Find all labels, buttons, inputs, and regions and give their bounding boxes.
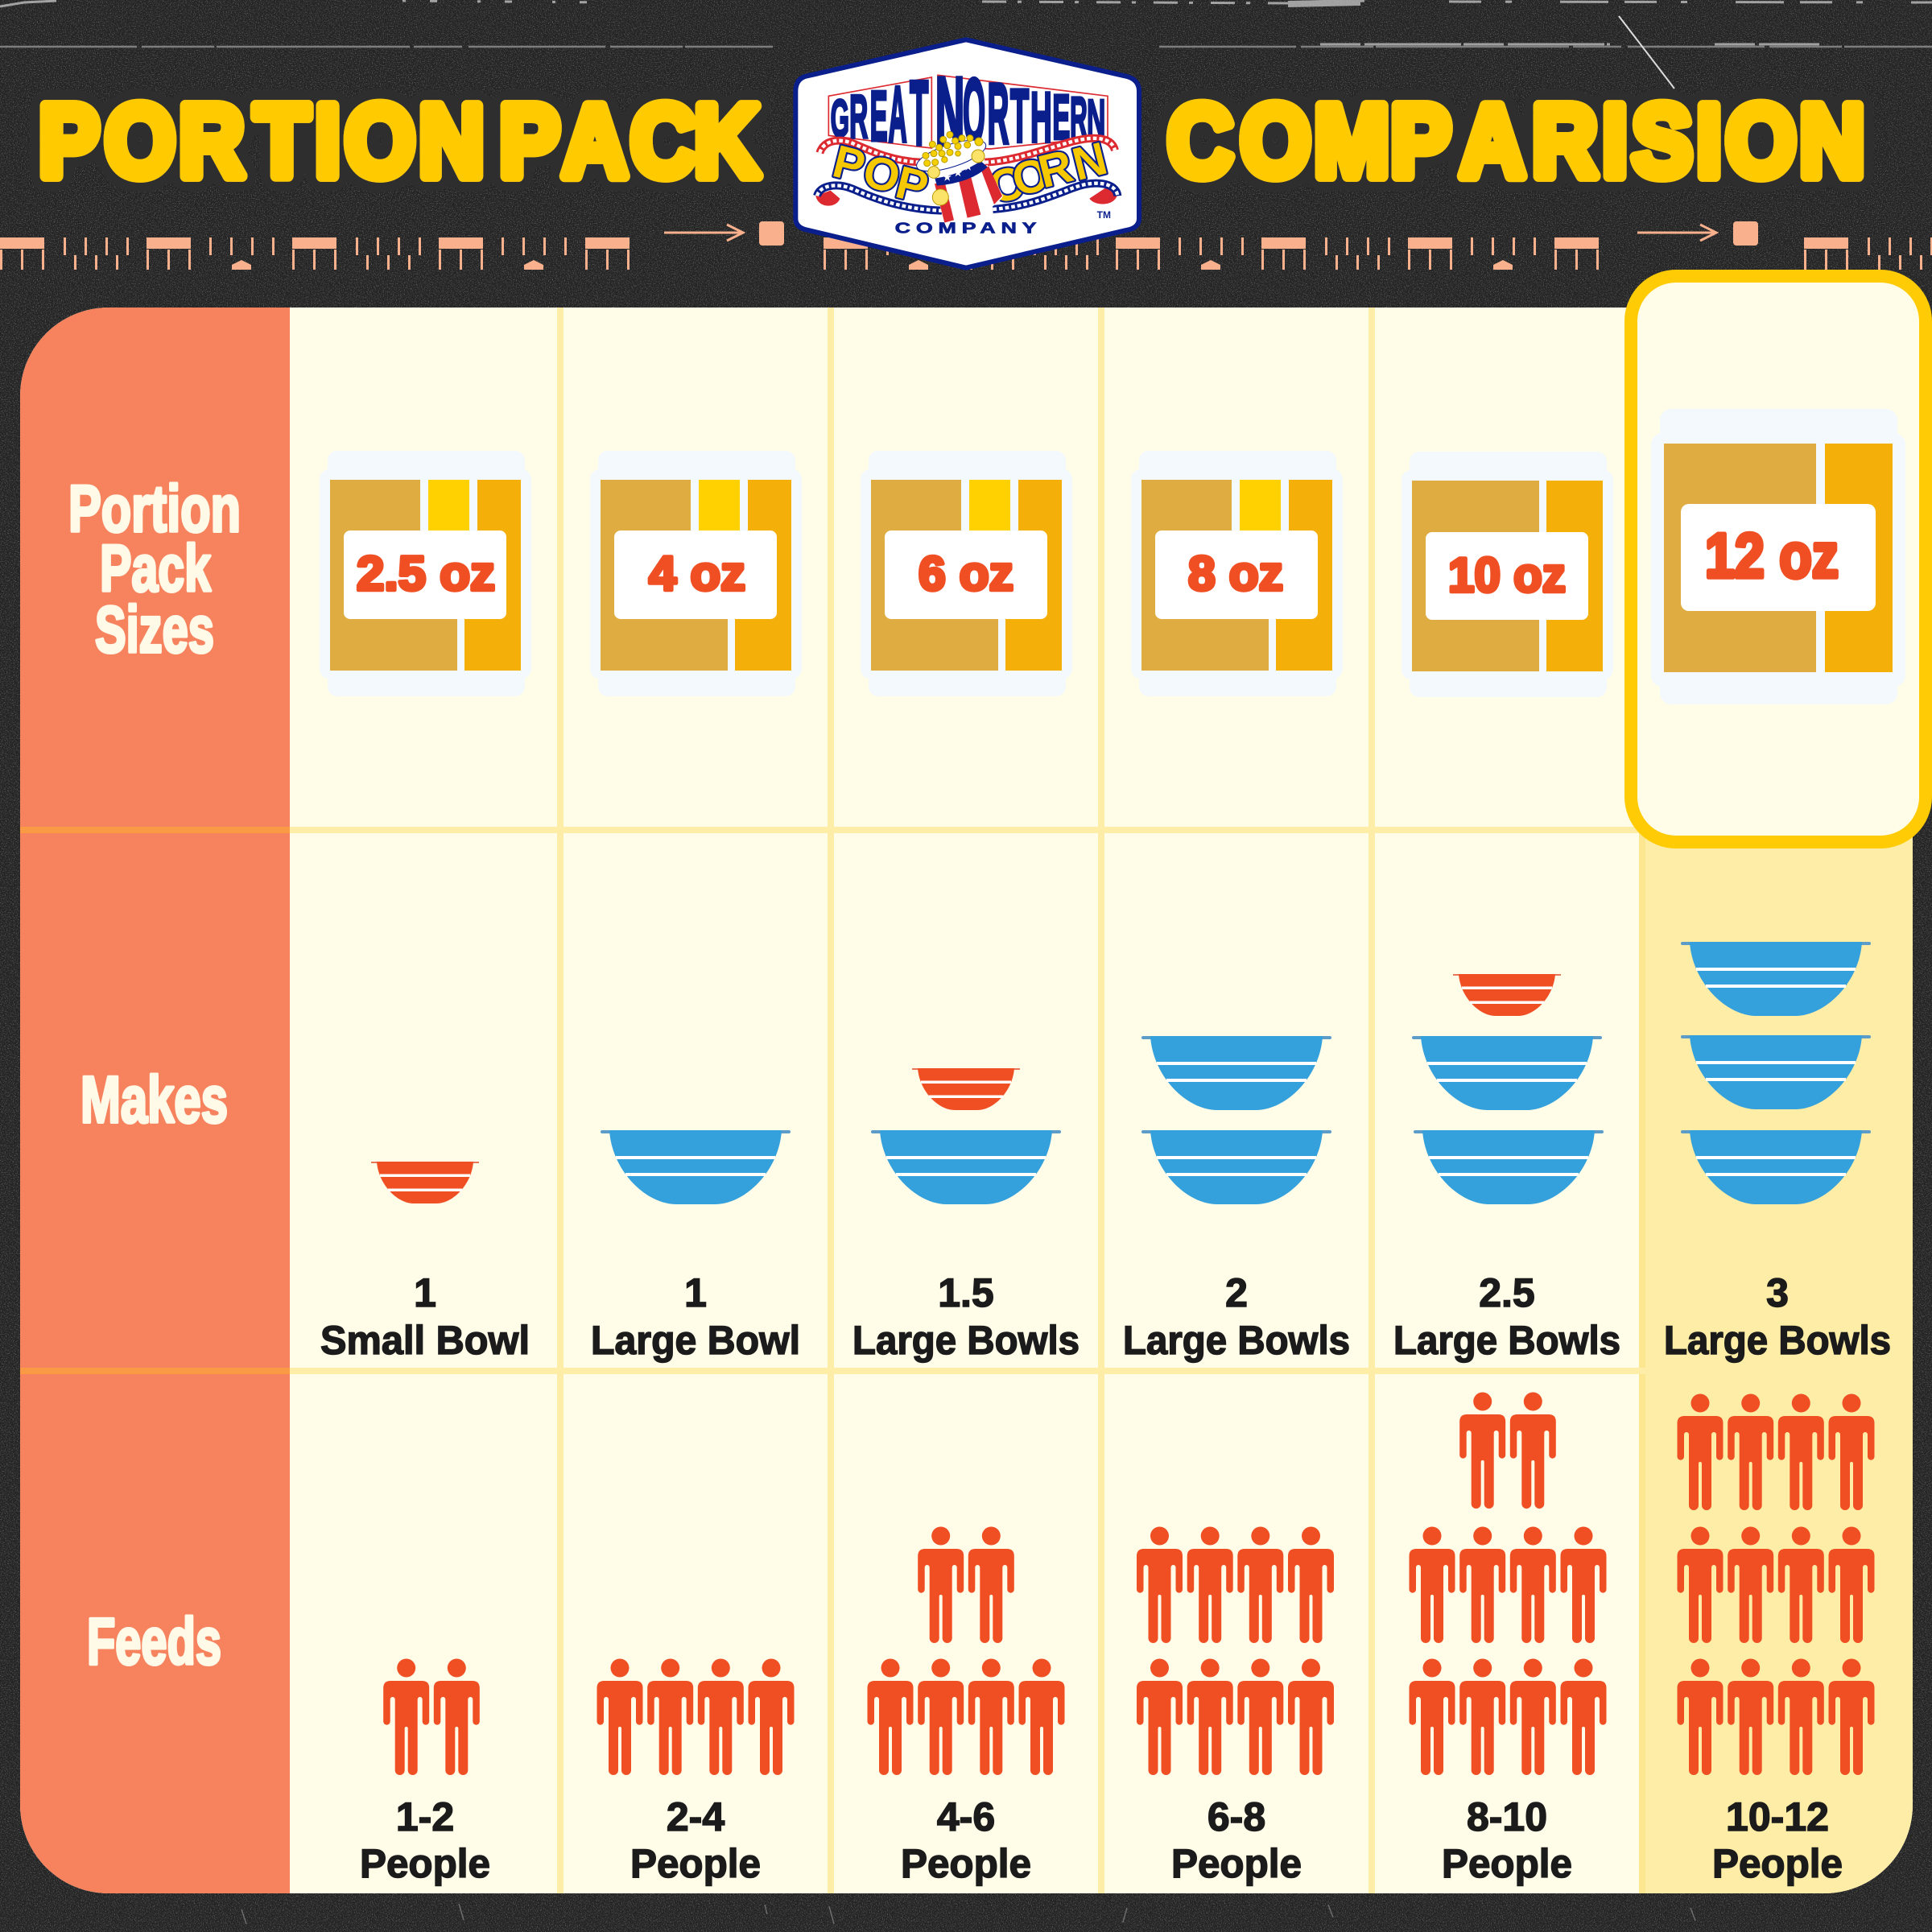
pack: 2.5 oz	[320, 451, 531, 696]
label: 2 large bowls	[1123, 1270, 1350, 1363]
logo: great northern popcorn company: ★	[964, 161, 972, 172]
label: 1 small bowl	[320, 1270, 530, 1363]
label: 4-6 people: People	[901, 1841, 1031, 1886]
pack: 8 oz	[1131, 451, 1343, 696]
label: 1-2 people: People	[360, 1841, 490, 1886]
logo: great northern popcorn company: TM	[1097, 209, 1111, 221]
logo: great northern popcorn company: E	[870, 77, 888, 156]
bowls: 1 large	[601, 1130, 791, 1204]
logo: great northern popcorn company: T	[910, 62, 928, 163]
pack: 4 oz	[590, 451, 802, 696]
people: 6-8	[1137, 1526, 1334, 1775]
logo: great northern popcorn company: N	[1087, 89, 1105, 147]
row label: makes: Makes	[80, 1063, 228, 1137]
label: 2.5 large bowls	[1393, 1270, 1620, 1363]
title: portion pack: PORTION PACK	[39, 85, 759, 198]
label: 1.5 large bowls	[852, 1270, 1080, 1363]
label: 6-8 people: People	[1171, 1841, 1302, 1886]
arrow and marker right	[1637, 221, 1758, 246]
decorative ruler strip left	[0, 237, 630, 270]
highlight frame: 12 oz column	[1631, 276, 1926, 842]
label: 2 large bowls: 2	[1225, 1270, 1248, 1315]
logo: great northern popcorn company: N	[935, 58, 964, 165]
people: 1-2	[383, 1658, 480, 1775]
label: 3 large bowls: 3	[1766, 1270, 1789, 1315]
label: 8-10 people	[1442, 1794, 1572, 1886]
label: 6-8 people: 6-8	[1208, 1794, 1265, 1839]
people: 10-12	[1678, 1394, 1874, 1775]
row label: portion pack sizes: Pack	[100, 532, 211, 605]
logo: great northern popcorn company: R	[988, 66, 1009, 161]
pack: 12 oz	[1651, 409, 1905, 704]
pack: 6 oz	[861, 451, 1072, 696]
logo: great northern popcorn company: ★	[943, 171, 952, 183]
title: comparision: COMPARISION	[1167, 85, 1864, 198]
label: 1-2 people	[360, 1794, 490, 1886]
row label: portion pack sizes: Sizes	[95, 593, 214, 667]
label: 1 small bowl: Small Bowl	[320, 1318, 530, 1363]
label: 1 large bowl	[591, 1270, 800, 1363]
pack: 10 oz: 10 oz	[1448, 548, 1566, 602]
logo: great northern popcorn company: COMPANY	[895, 219, 1042, 236]
label: 2-4 people: 2-4	[667, 1794, 724, 1839]
logo: great northern popcorn company: C	[985, 156, 1029, 214]
label: 10-12 people	[1712, 1794, 1843, 1886]
pack: 10 oz	[1402, 452, 1613, 697]
label: 1 large bowl: Large Bowl	[591, 1318, 800, 1363]
label: 4-6 people	[901, 1794, 1031, 1886]
label: 2.5 large bowls: Large Bowls	[1393, 1318, 1620, 1363]
label: 2-4 people: People	[630, 1841, 761, 1886]
arrow and marker left	[664, 221, 784, 246]
row label: portion pack sizes: Portion	[68, 473, 241, 546]
logo: great northern popcorn company: P	[828, 136, 870, 193]
row label: feeds: Feeds	[87, 1605, 221, 1678]
logo: great northern popcorn company: O	[963, 60, 985, 163]
pack: 4 oz: 4 oz	[649, 547, 745, 601]
label: 2.5 large bowls: 2.5	[1479, 1270, 1535, 1315]
bowls: 2.5 large	[1412, 974, 1604, 1204]
label: 1 small bowl: 1	[414, 1270, 436, 1315]
logo: great northern popcorn company: N	[1067, 133, 1113, 191]
label: 8-10 people: People	[1442, 1841, 1572, 1886]
decorative ruler strip right	[824, 237, 1932, 270]
pack: 12 oz: 12 oz	[1705, 520, 1839, 591]
pack: 2.5 oz: 2.5 oz	[357, 547, 495, 601]
label: 4-6 people: 4-6	[937, 1794, 995, 1839]
label: 2 large bowls: Large Bowls	[1123, 1318, 1350, 1363]
logo: great northern popcorn company	[795, 39, 1139, 268]
logo: great northern popcorn company: O	[1007, 148, 1055, 207]
label: 10-12 people: People	[1712, 1841, 1843, 1886]
logo: great northern popcorn company: R	[849, 83, 868, 151]
logo: great northern popcorn company: E	[1052, 81, 1070, 153]
label: 3 large bowls	[1664, 1270, 1891, 1363]
label: 8-10 people: 8-10	[1467, 1794, 1547, 1839]
row label: portion pack sizes	[68, 473, 241, 667]
bowls: 1.5 large	[871, 1068, 1061, 1204]
logo: great northern popcorn company: O	[858, 145, 906, 204]
bowls: 3 large	[1681, 942, 1871, 1204]
logo: great northern popcorn company: ★	[954, 167, 963, 179]
bowls: 2 large	[1141, 1036, 1331, 1204]
people: 8-10	[1409, 1393, 1607, 1775]
logo: great northern popcorn company: G	[831, 89, 849, 147]
logo: great northern popcorn company: R	[1070, 85, 1088, 151]
logo: great northern popcorn company: H	[1030, 79, 1052, 158]
label: 1 large bowl: 1	[684, 1270, 707, 1315]
logo: great northern popcorn company: R	[1034, 140, 1078, 198]
label: 10-12 people: 10-12	[1726, 1794, 1829, 1839]
bowls: 1 small	[371, 1162, 479, 1203]
pack: 8 oz: 8 oz	[1188, 547, 1283, 601]
label: 1.5 large bowls: 1.5	[938, 1270, 994, 1315]
logo: great northern popcorn company: T	[1010, 74, 1029, 159]
label: 3 large bowls: Large Bowls	[1664, 1318, 1891, 1363]
people: 2-4	[597, 1658, 794, 1775]
label: 1-2 people: 1-2	[396, 1794, 454, 1839]
logo: great northern popcorn company: P	[891, 157, 933, 214]
label: 2-4 people	[630, 1794, 761, 1886]
logo: great northern popcorn company: A	[888, 72, 907, 159]
label: 6-8 people	[1171, 1794, 1302, 1886]
pack: 6 oz: 6 oz	[919, 547, 1013, 601]
people: 4-6	[868, 1526, 1064, 1775]
label: 1.5 large bowls: Large Bowls	[852, 1318, 1080, 1363]
